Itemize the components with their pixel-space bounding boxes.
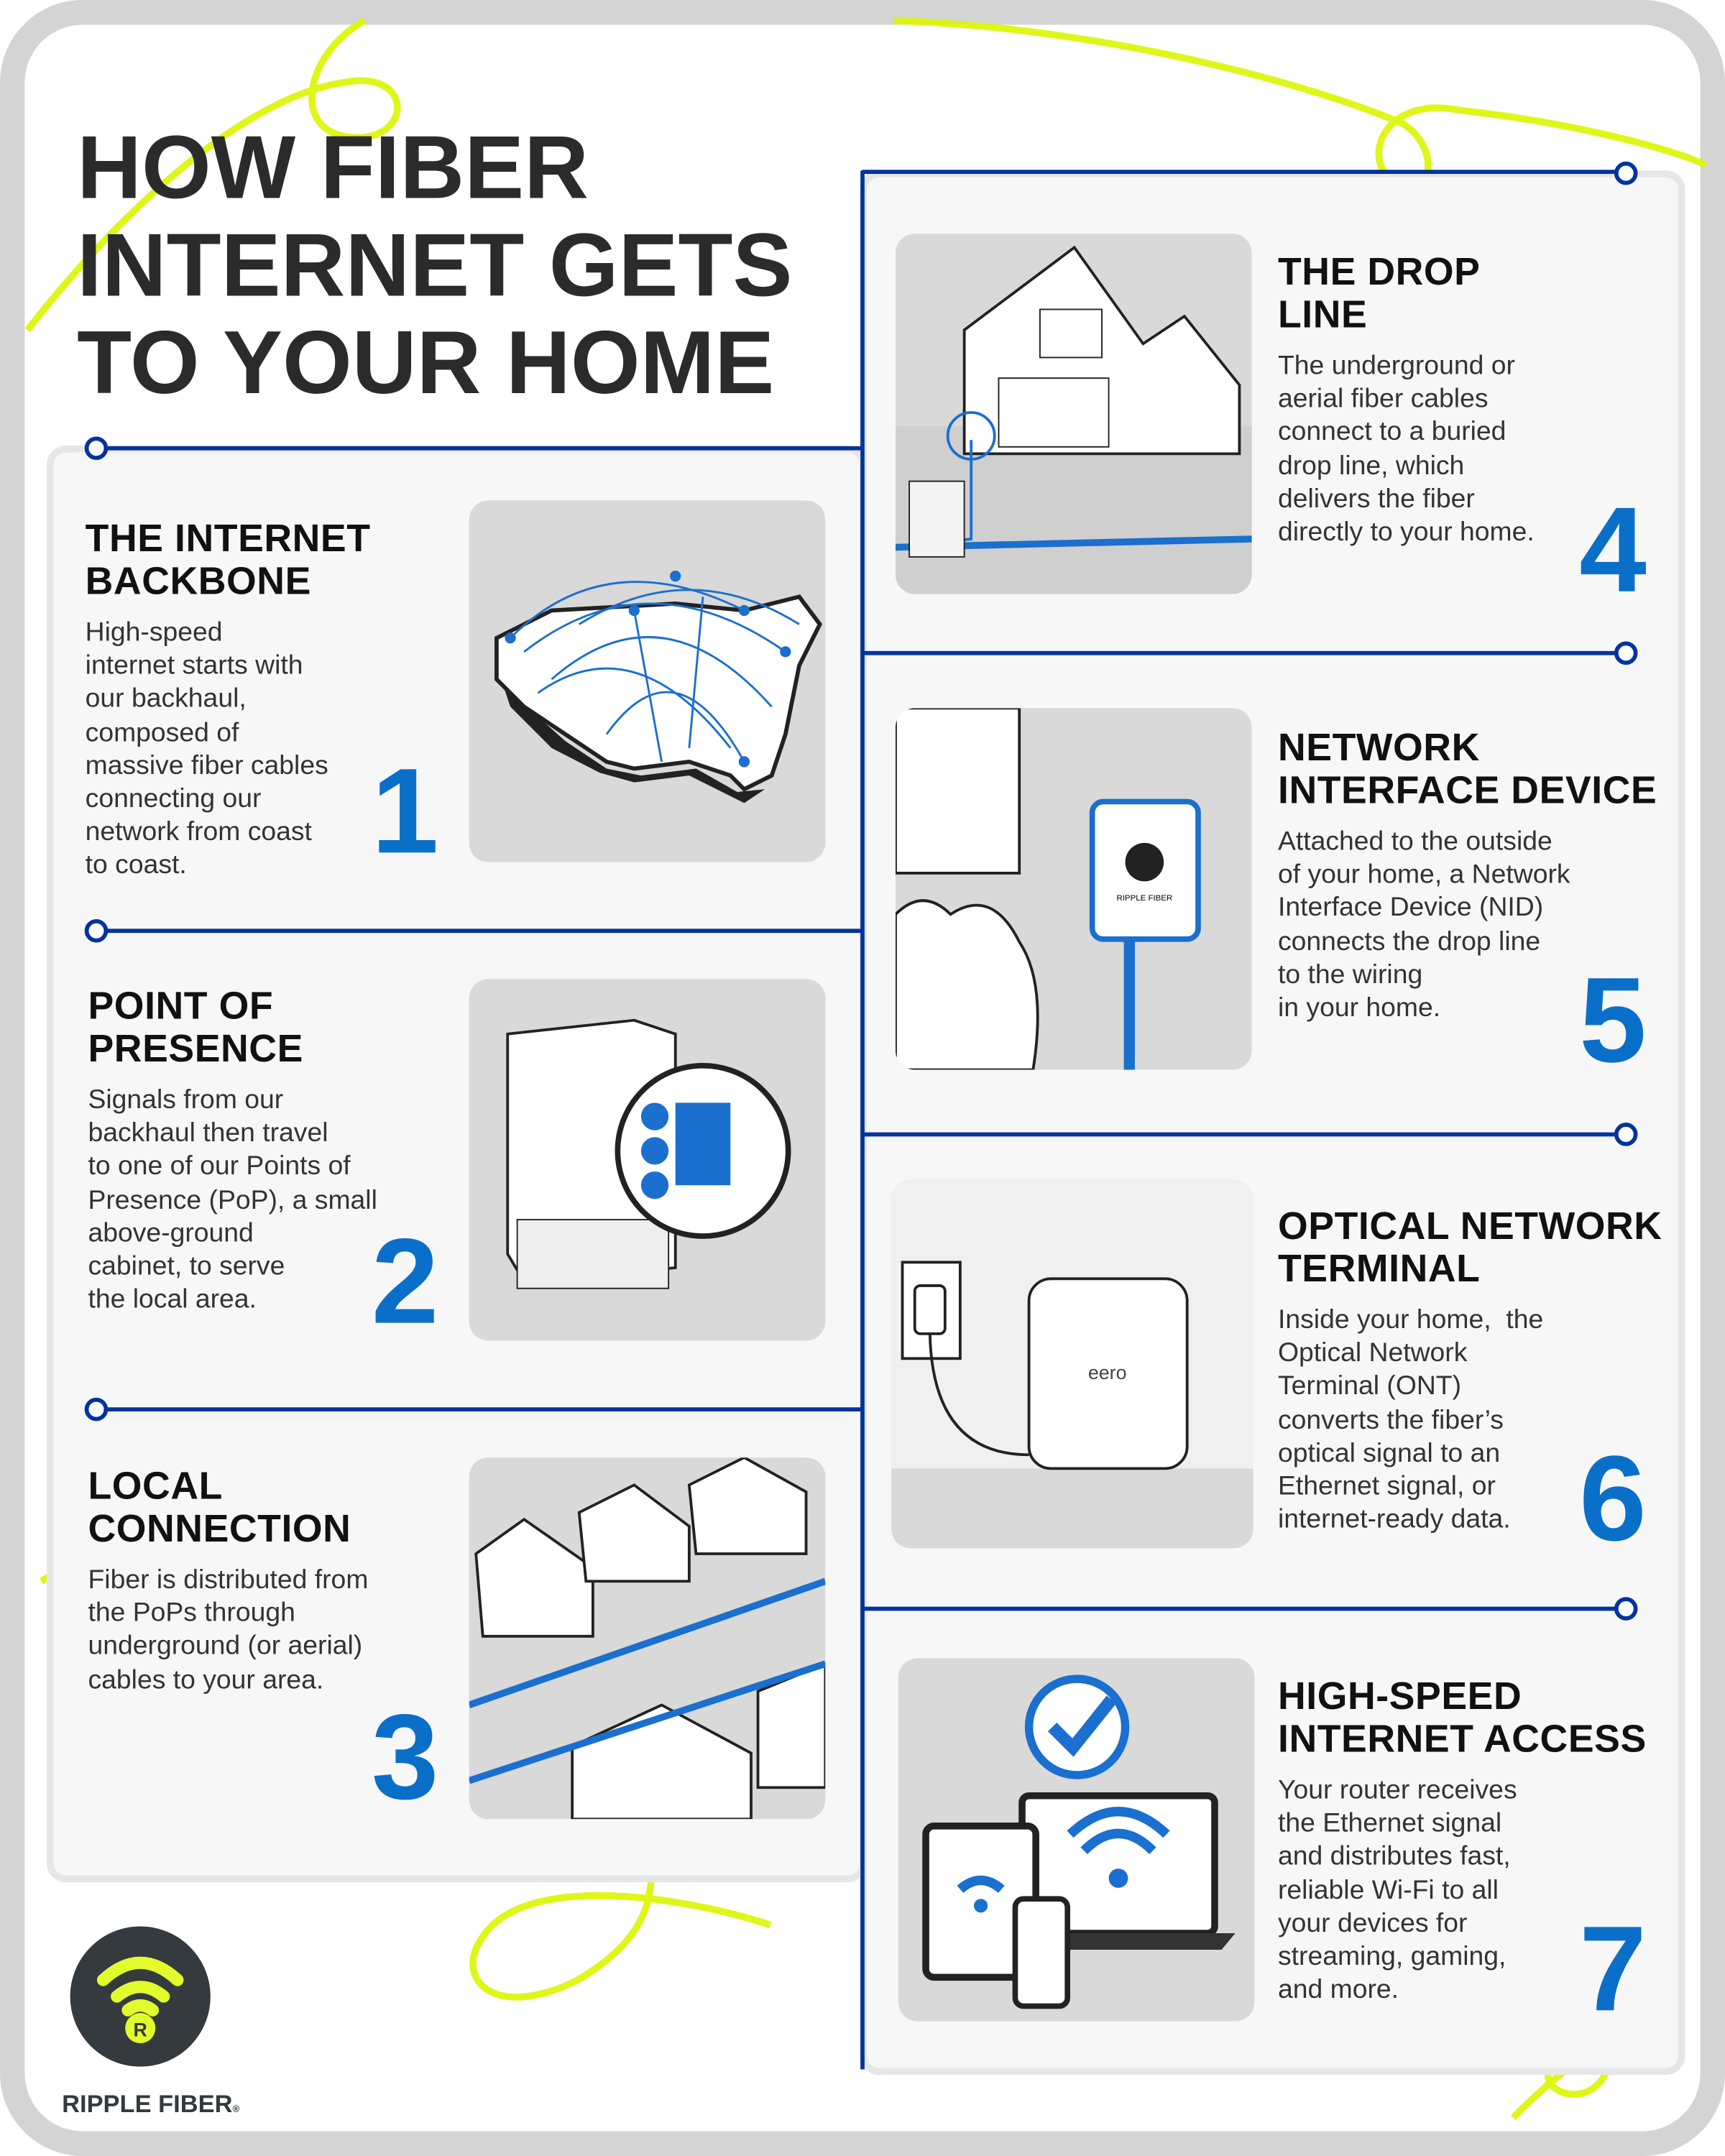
body text: internet starts with: [86, 650, 303, 681]
body text: [86, 617, 328, 880]
body text: connect to a buried: [1278, 417, 1506, 448]
number 3: 3: [372, 1688, 438, 1825]
heading: [1278, 726, 1657, 811]
body text: The underground or: [1278, 351, 1515, 381]
body text: Your router receives: [1278, 1775, 1517, 1805]
body text: of your home, a Network: [1278, 860, 1570, 890]
heading: BACKBONE: [86, 560, 311, 602]
logo text: RIPPLE FIBER®: [62, 2090, 239, 2117]
body text: the Ethernet signal: [1278, 1808, 1501, 1838]
logo: R: [134, 2019, 147, 2041]
heading: [88, 985, 303, 1070]
body text: connects the drop line: [1278, 926, 1540, 957]
step 1: [86, 517, 371, 880]
body text: [1278, 826, 1570, 1023]
body text: composed of: [86, 717, 239, 747]
body text: internet-ready data.: [1278, 1505, 1511, 1535]
step 6: [1278, 1204, 1662, 1535]
heading: THE INTERNET: [86, 517, 371, 560]
body text: Inside your home, the: [1278, 1305, 1543, 1335]
panel: left steps: [47, 446, 867, 1882]
heading: CONNECTION: [88, 1507, 351, 1549]
body text: Signals from our: [88, 1085, 283, 1115]
number 7: 7: [1579, 1900, 1647, 2037]
heading: INTERFACE DEVICE: [1278, 769, 1657, 811]
body text: in your home.: [1278, 992, 1440, 1023]
heading: INTERNET ACCESS: [1278, 1718, 1647, 1760]
image: cabinet: [469, 979, 825, 1340]
image: neighborhood: [469, 1457, 825, 1819]
body text: to coast.: [86, 850, 187, 880]
panel: right steps: [860, 170, 1685, 2075]
heading: NETWORK: [1278, 726, 1480, 769]
heading: POINT OF: [88, 985, 273, 1027]
body text: to one of our Points of: [88, 1151, 351, 1181]
image: devices: [898, 1658, 1254, 2022]
heading: LINE: [1278, 293, 1367, 336]
image: NID: RIPPLE FIBER: [1116, 894, 1172, 903]
body text: to the wiring: [1278, 959, 1422, 990]
body text: directly to your home.: [1278, 517, 1535, 548]
heading: THE DROP: [1278, 250, 1480, 293]
body text: Optical Network: [1278, 1338, 1467, 1368]
image: ONT: [891, 1180, 1254, 1548]
image: NID: [896, 708, 1252, 1070]
number 2: 2: [372, 1213, 438, 1349]
body text: backhaul then travel: [88, 1118, 328, 1148]
body text: Terminal (ONT): [1278, 1371, 1461, 1401]
body text: underground (or aerial): [88, 1631, 362, 1662]
title: TO YOUR HOME: [77, 312, 774, 413]
step 3: [88, 1465, 368, 1695]
number 1: 1: [372, 742, 438, 879]
body text: [1278, 1775, 1517, 2005]
heading: OPTICAL NETWORK: [1278, 1204, 1662, 1247]
body text: aerial fiber cables: [1278, 384, 1489, 414]
heading: [1278, 1204, 1662, 1290]
body text: [1278, 1305, 1543, 1535]
heading: HIGH-SPEED: [1278, 1674, 1522, 1718]
step 7: [1278, 1674, 1647, 2005]
body text: Ethernet signal, or: [1278, 1471, 1496, 1501]
logo: [62, 1926, 240, 2117]
body text: High-speed: [86, 617, 223, 648]
step 2: [88, 985, 377, 1315]
heading: LOCAL: [88, 1465, 223, 1507]
body text: delivers the fiber: [1278, 484, 1475, 514]
image: house: [896, 234, 1252, 594]
body text: the PoPs through: [88, 1598, 295, 1628]
body text: network from coast: [86, 817, 312, 847]
body text: [1278, 351, 1535, 548]
body text: above-ground: [88, 1218, 254, 1248]
body text: converts the fiber’s: [1278, 1405, 1504, 1435]
body text: [88, 1565, 368, 1695]
number 5: 5: [1579, 952, 1647, 1087]
heading: [88, 1465, 351, 1549]
body text: connecting our: [86, 784, 261, 814]
body text: [88, 1085, 377, 1315]
heading: [1278, 250, 1480, 336]
body text: Attached to the outside: [1278, 826, 1552, 857]
body text: Presence (PoP), a small: [88, 1184, 377, 1215]
body text: reliable Wi-Fi to all: [1278, 1875, 1499, 1905]
body text: and more.: [1278, 1975, 1399, 2005]
body text: optical signal to an: [1278, 1438, 1500, 1468]
heading: PRESENCE: [88, 1027, 303, 1070]
body text: cabinet, to serve: [88, 1251, 285, 1281]
body text: drop line, which: [1278, 451, 1464, 481]
body text: your devices for: [1278, 1908, 1467, 1938]
number 6: 6: [1579, 1430, 1647, 1566]
body text: the local area.: [88, 1284, 257, 1315]
body text: our backhaul,: [86, 684, 247, 714]
body text: streaming, gaming,: [1278, 1942, 1506, 1972]
body text: Interface Device (NID): [1278, 893, 1543, 923]
body text: cables to your area.: [88, 1664, 323, 1695]
image: ONT: eero: [1088, 1362, 1126, 1383]
title: INTERNET GETS: [77, 214, 792, 315]
number 4: 4: [1579, 482, 1647, 617]
heading: TERMINAL: [1278, 1247, 1480, 1290]
heading: [1278, 1674, 1647, 1760]
title: [77, 117, 792, 413]
body text: massive fiber cables: [86, 750, 328, 780]
body text: Fiber is distributed from: [88, 1565, 368, 1595]
body text: and distributes fast,: [1278, 1842, 1511, 1872]
step 5: [1278, 726, 1657, 1023]
heading: [86, 517, 371, 602]
image: US map: [469, 500, 825, 862]
title: HOW FIBER: [77, 117, 589, 217]
step 4: [1278, 250, 1535, 548]
